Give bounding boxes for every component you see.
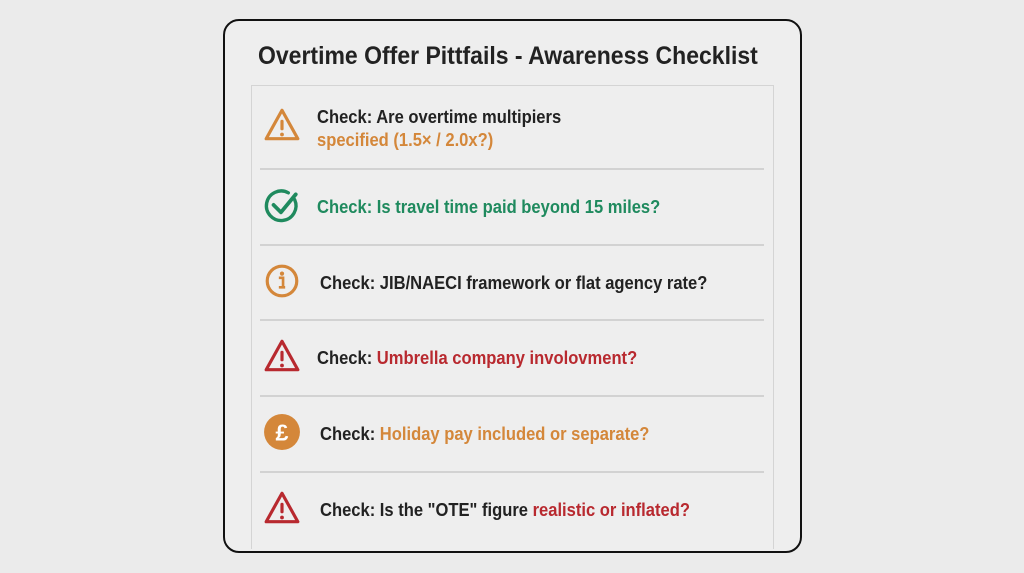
- icon: red warning: [264, 340, 300, 372]
- text: multipliers: Check: Are overtime multipiers: [317, 106, 561, 127]
- text: JIB/NAECI: Check: JIB/NAECI framework or flat agency rate?: [320, 272, 707, 293]
- card: [223, 19, 802, 553]
- icon: pound coin: £: [276, 419, 289, 445]
- text: umbrella: Check: Umbrella company involovment?: [317, 347, 637, 368]
- checklist panel: [251, 85, 774, 549]
- icon: pound coin: [264, 414, 300, 450]
- icon: red warning 2: [264, 492, 300, 524]
- text: OTE: Check: Is the "OTE" figure realistic or inflated?: [320, 499, 690, 520]
- icon: orange warning: [264, 108, 300, 140]
- text: multipliers: [317, 106, 561, 150]
- icon: info: [266, 264, 298, 298]
- icon: green check: [264, 189, 298, 222]
- title: Overtime Offer Pittfails - Awareness Checklist: [258, 42, 758, 70]
- text: travel time: Check: Is travel time paid beyond 15 miles?: [317, 196, 660, 217]
- text: holiday pay: Check: Holiday pay included or separate?: [320, 423, 649, 444]
- text: multipliers: specified (1.5× / 2.0x?): [317, 129, 493, 150]
